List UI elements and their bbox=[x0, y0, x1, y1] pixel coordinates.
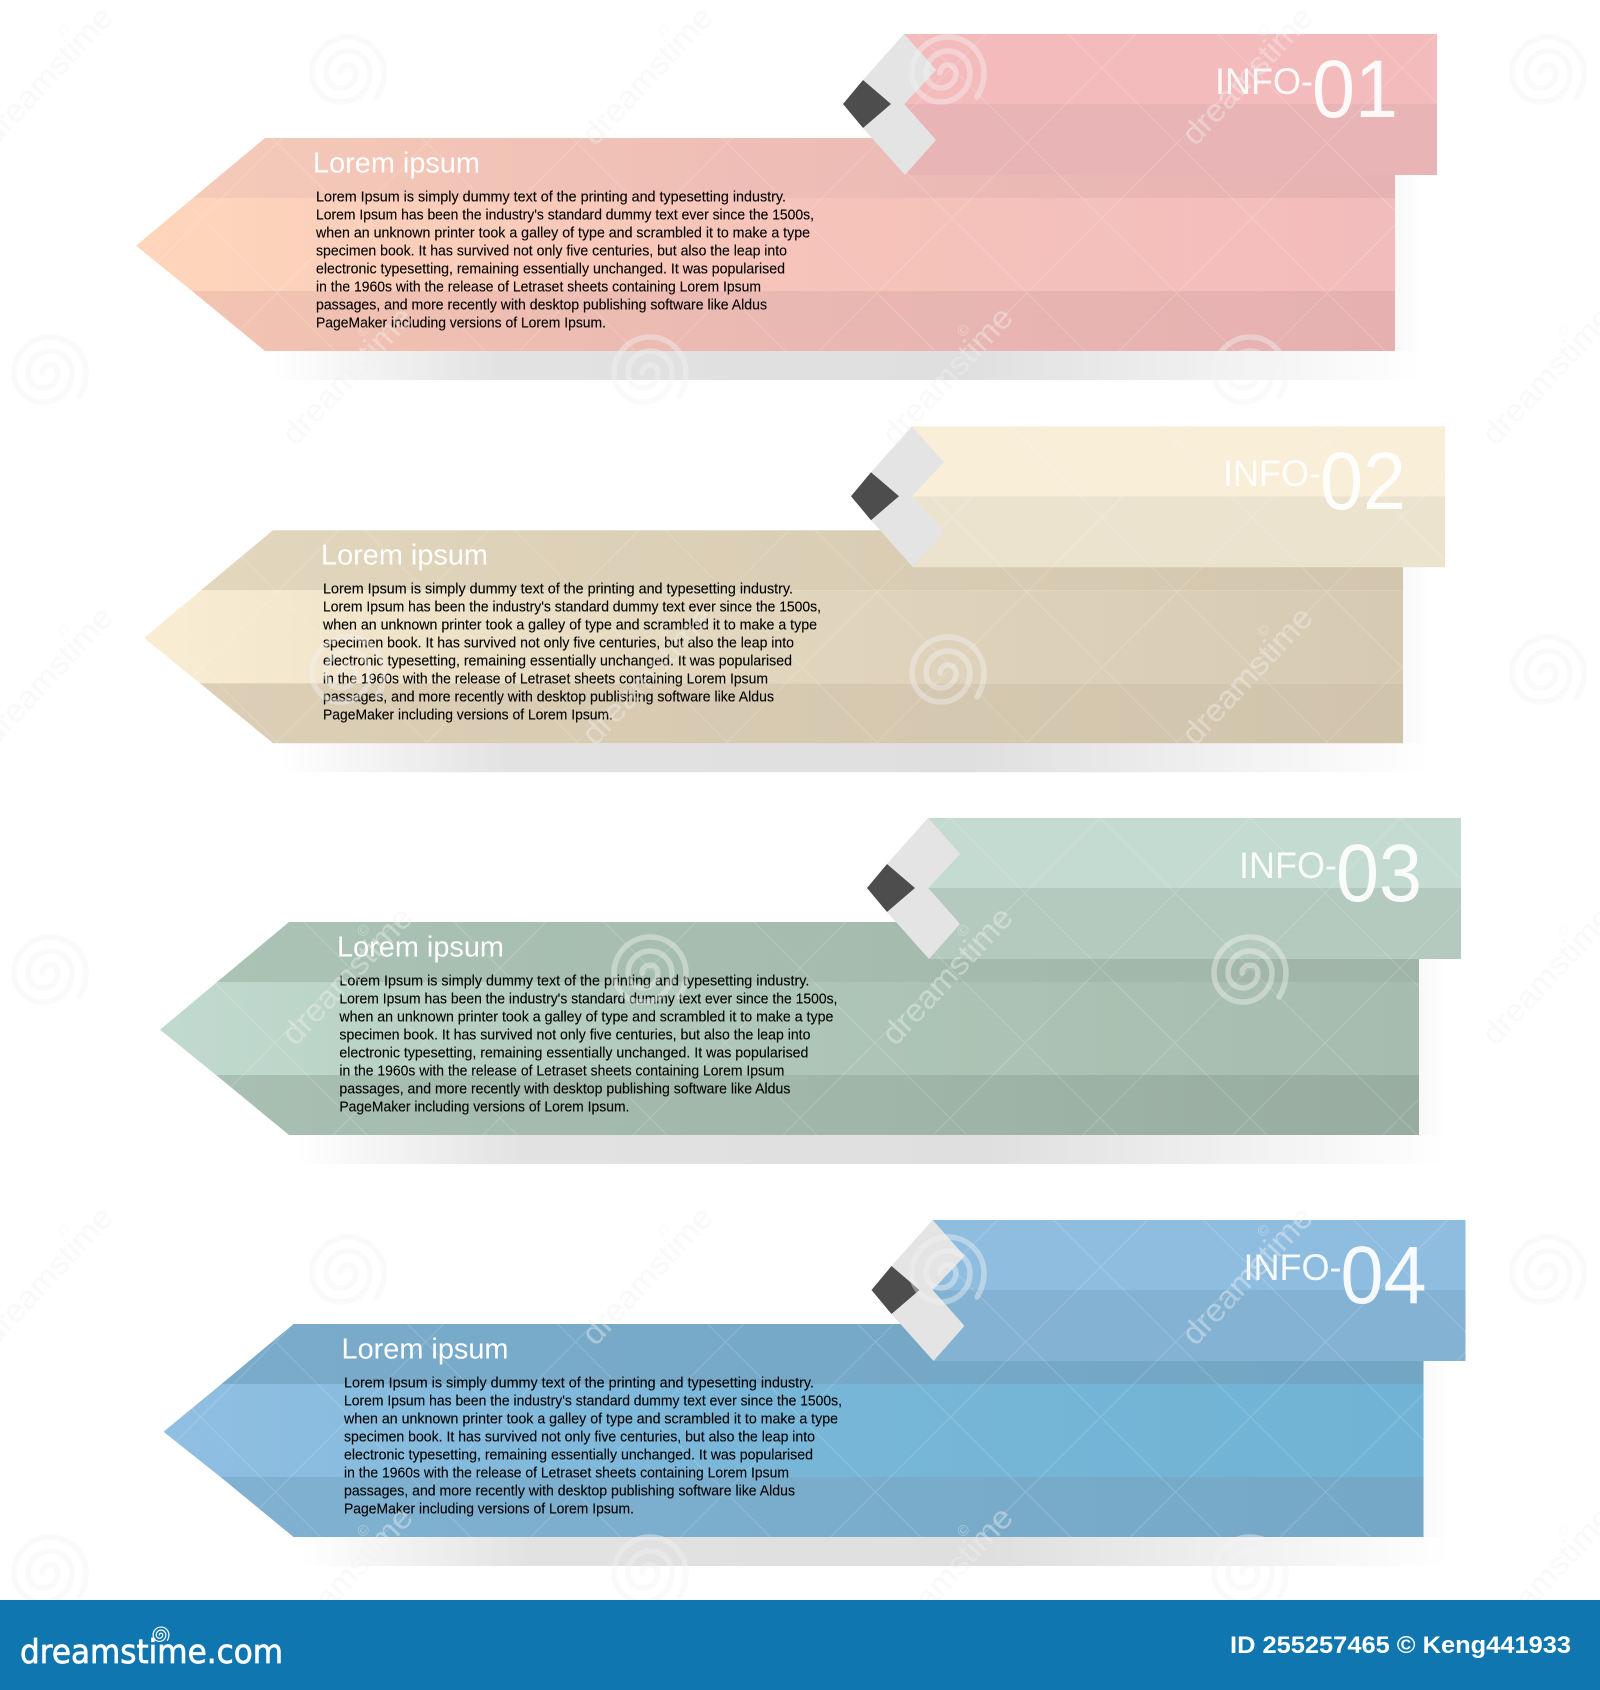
watermark overlay: © bbox=[954, 1521, 974, 1541]
text block: passages, and more recently with desktop publishing software like Aldus bbox=[339, 1082, 790, 1098]
text block: when an unknown printer took a galley of type and scrambled it to make a type bbox=[315, 226, 810, 242]
number tab bbox=[904, 34, 1437, 175]
number tab bbox=[932, 1220, 1466, 1361]
text block: Lorem Ipsum is simply dummy text of the printing and typesetting industry. bbox=[344, 1376, 814, 1392]
icon: light chevron bbox=[887, 818, 960, 959]
bottom shadow bbox=[296, 1135, 1446, 1164]
tab label: INFO- bbox=[1215, 61, 1313, 102]
watermark overlay: © bbox=[654, 1221, 674, 1241]
panel: info 04 (blue) bbox=[164, 1220, 1466, 1566]
text block: electronic typesetting, remaining essentially unchanged. It was popularised bbox=[344, 1448, 813, 1464]
arrow body bbox=[144, 530, 1403, 743]
side shadow bbox=[1422, 1361, 1450, 1537]
watermark overlay: © bbox=[1254, 21, 1274, 41]
heading: Lorem ipsum bbox=[321, 540, 488, 572]
text block: electronic typesetting, remaining essentially unchanged. It was popularised bbox=[316, 262, 785, 278]
watermark overlay: dreamstime bbox=[274, 899, 420, 1052]
tab label: INFO- bbox=[1223, 453, 1321, 494]
text block: electronic typesetting, remaining essentially unchanged. It was popularised bbox=[339, 1046, 808, 1062]
text block: Lorem Ipsum is simply dummy text of the printing and typesetting industry. bbox=[323, 582, 793, 598]
text block bbox=[343, 1376, 842, 1518]
watermark overlay: dreamstime bbox=[274, 299, 420, 452]
watermark overlay: © bbox=[354, 921, 374, 941]
watermark overlay: © bbox=[1554, 921, 1574, 941]
text block: specimen book. It has survived not only five centuries, but also the leap into bbox=[316, 244, 787, 260]
icon: dark diamond bbox=[867, 864, 915, 912]
text block: specimen book. It has survived not only five centuries, but also the leap into bbox=[323, 636, 794, 652]
brand logo text: dreamstime.com bbox=[20, 1632, 283, 1671]
panel: info 02 (beige) bbox=[144, 426, 1445, 772]
text block: electronic typesetting, remaining essentially unchanged. It was popularised bbox=[323, 654, 792, 670]
watermark overlay: dreamstime bbox=[574, 599, 720, 752]
watermark overlay: © bbox=[54, 621, 74, 641]
text block: when an unknown printer took a galley of type and scrambled it to make a type bbox=[343, 1412, 838, 1428]
panel: info 01 (pink) bbox=[136, 34, 1437, 380]
text block: PageMaker including versions of Lorem Ipsum. bbox=[316, 316, 606, 332]
text block: PageMaker including versions of Lorem Ipsum. bbox=[339, 1100, 629, 1116]
text block: Lorem Ipsum has been the industry's standard dummy text ever since the 1500s, bbox=[323, 600, 821, 616]
watermark overlay: © bbox=[654, 621, 674, 641]
bottom shadow bbox=[300, 1537, 1450, 1566]
watermark overlay: © bbox=[954, 921, 974, 941]
watermark overlay: © bbox=[54, 21, 74, 41]
watermark overlay: dreamstime bbox=[1174, 0, 1320, 152]
number tab bbox=[912, 426, 1445, 567]
text block bbox=[338, 974, 837, 1116]
text block: Lorem Ipsum is simply dummy text of the printing and typesetting industry. bbox=[316, 190, 786, 206]
watermark overlay: dreamstime bbox=[574, 1199, 720, 1352]
text block: PageMaker including versions of Lorem Ipsum. bbox=[344, 1502, 634, 1518]
heading: Lorem ipsum bbox=[342, 1334, 508, 1366]
watermark overlay: dreamstime bbox=[874, 1499, 1020, 1652]
watermark overlay: dreamstime bbox=[274, 1499, 420, 1652]
text block: when an unknown printer took a galley of type and scrambled it to make a type bbox=[338, 1010, 833, 1026]
watermark overlay: © bbox=[1254, 1221, 1274, 1241]
watermark overlay: © bbox=[354, 321, 374, 341]
bottom shadow bbox=[272, 351, 1422, 380]
arrow body bbox=[136, 138, 1395, 351]
icon: light chevron bbox=[871, 426, 944, 567]
watermark overlay: dreamstime bbox=[874, 899, 1020, 1052]
panel: info 03 (green) bbox=[160, 818, 1461, 1164]
side shadow bbox=[1402, 567, 1430, 743]
tab label: 01 bbox=[1312, 44, 1398, 135]
watermark overlay: dreamstime bbox=[1174, 599, 1320, 752]
watermark overlay: dreamstime bbox=[874, 299, 1020, 452]
image credit: ID 255257465 © Keng441933 bbox=[1230, 1632, 1571, 1659]
tab label bbox=[1215, 44, 1398, 135]
text block: passages, and more recently with desktop publishing software like Aldus bbox=[316, 298, 767, 314]
icon: dark diamond bbox=[851, 472, 899, 520]
bottom shadow bbox=[280, 743, 1430, 772]
text block: in the 1960s with the release of Letraset sheets containing Lorem Ipsum bbox=[339, 1064, 784, 1080]
text block: specimen book. It has survived not only five centuries, but also the leap into bbox=[344, 1430, 815, 1446]
number tab bbox=[928, 818, 1461, 959]
text block: passages, and more recently with desktop publishing software like Aldus bbox=[344, 1484, 795, 1500]
watermark overlay: dreamstime bbox=[574, 0, 720, 152]
footer banner bbox=[0, 1600, 1600, 1690]
icon: light chevron bbox=[892, 1220, 964, 1361]
text block: specimen book. It has survived not only five centuries, but also the leap into bbox=[339, 1028, 810, 1044]
icon: logo spiral bbox=[153, 1627, 169, 1641]
tab label: 02 bbox=[1320, 436, 1406, 527]
tab label: INFO- bbox=[1239, 845, 1337, 886]
icon: light chevron bbox=[863, 34, 936, 175]
text block: PageMaker including versions of Lorem Ipsum. bbox=[323, 708, 613, 724]
tab label: 04 bbox=[1340, 1230, 1426, 1321]
tab label bbox=[1239, 828, 1422, 919]
icon: dark diamond bbox=[872, 1266, 920, 1314]
text block: passages, and more recently with desktop publishing software like Aldus bbox=[323, 690, 774, 706]
text block: Lorem Ipsum is simply dummy text of the printing and typesetting industry. bbox=[339, 974, 809, 990]
text block bbox=[315, 190, 814, 332]
text block: Lorem Ipsum has been the industry's standard dummy text ever since the 1500s, bbox=[339, 992, 837, 1008]
tab label bbox=[1223, 436, 1406, 527]
text block: Lorem Ipsum has been the industry's standard dummy text ever since the 1500s, bbox=[344, 1394, 842, 1410]
arrow body bbox=[160, 922, 1419, 1135]
tab label: INFO- bbox=[1244, 1247, 1342, 1288]
watermark overlay: © bbox=[1254, 621, 1274, 641]
watermark overlay: © bbox=[1554, 1521, 1574, 1541]
watermark overlay: dreamstime bbox=[1174, 1199, 1320, 1352]
text block: in the 1960s with the release of Letraset sheets containing Lorem Ipsum bbox=[344, 1466, 789, 1482]
tab label bbox=[1244, 1230, 1426, 1321]
heading: Lorem ipsum bbox=[313, 148, 480, 180]
tab label: 03 bbox=[1336, 828, 1422, 919]
side shadow bbox=[1418, 959, 1446, 1135]
text block: in the 1960s with the release of Letraset sheets containing Lorem Ipsum bbox=[316, 280, 761, 296]
heading: Lorem ipsum bbox=[337, 932, 504, 964]
text block: Lorem Ipsum has been the industry's standard dummy text ever since the 1500s, bbox=[316, 208, 814, 224]
watermark overlay: © bbox=[654, 21, 674, 41]
side shadow bbox=[1394, 175, 1422, 351]
watermark overlay: © bbox=[354, 1521, 374, 1541]
arrow body bbox=[164, 1324, 1424, 1537]
watermark overlay: © bbox=[54, 1221, 74, 1241]
watermark overlay: © bbox=[954, 321, 974, 341]
icon: dark diamond bbox=[843, 80, 891, 128]
watermark overlay: © bbox=[1554, 321, 1574, 341]
text block: in the 1960s with the release of Letraset sheets containing Lorem Ipsum bbox=[323, 672, 768, 688]
text block bbox=[322, 582, 821, 724]
text block: when an unknown printer took a galley of type and scrambled it to make a type bbox=[322, 618, 817, 634]
